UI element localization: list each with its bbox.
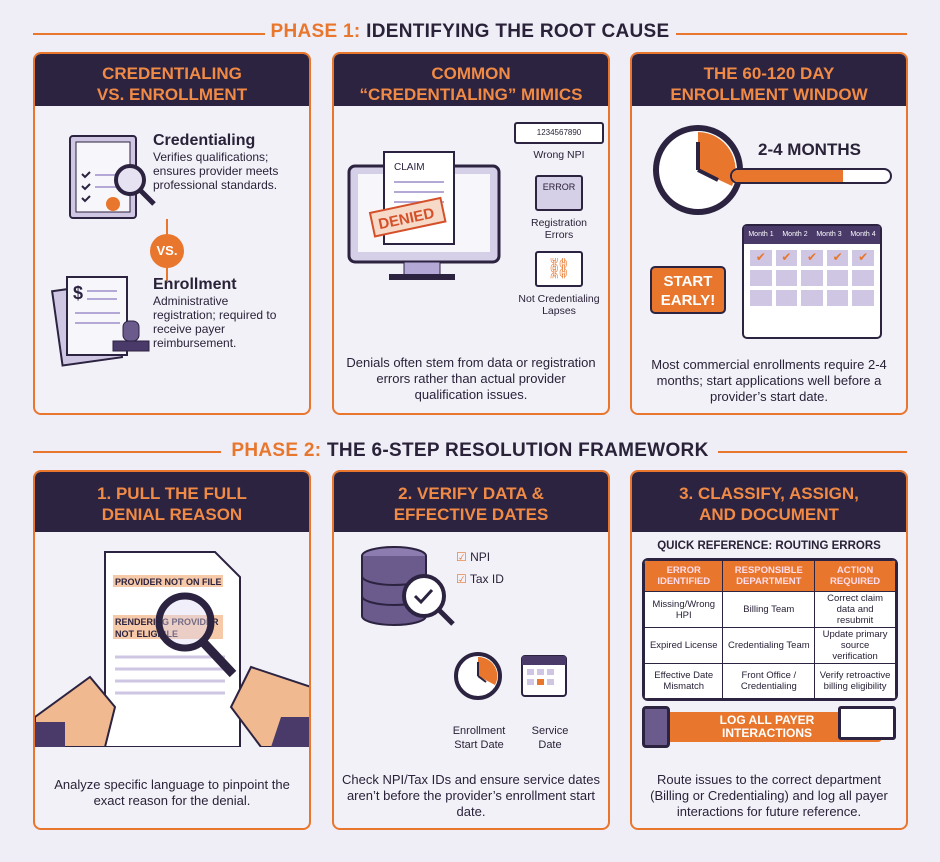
icon: documents with stamp — [51, 276, 150, 367]
panel header: EFFECTIVE DATES — [394, 505, 548, 524]
caption: Analyze specific language to pinpoint the exact reason for the denial. — [54, 777, 290, 808]
icon: calendar: ✔ — [833, 250, 843, 264]
panel: step 3 — [630, 470, 908, 830]
panel: step 2: Date — [538, 739, 562, 751]
panel header: “CREDENTIALING” MIMICS — [360, 85, 582, 104]
panel header — [35, 472, 309, 532]
panel: common mimics — [332, 52, 610, 415]
icon: database with checkmark — [361, 546, 455, 626]
icon: document with magnifier and hands: NOT ELIGIBLE — [115, 629, 178, 639]
panel header: 1. PULL THE FULL — [97, 484, 247, 503]
table: routing errors: ERROR IDENTIFIED — [657, 565, 710, 587]
panel header: VS. ENROLLMENT — [97, 85, 247, 104]
panel: step 2: Service — [532, 725, 568, 737]
icon: calendar: ✔ — [781, 250, 791, 264]
panel header — [334, 472, 608, 532]
checklist: npi, tax id: ☑ Tax ID — [456, 572, 504, 586]
banner: log all payer interactions: LOG ALL PAYER — [720, 713, 814, 727]
panel: credentialing vs enrollment: VS. — [157, 243, 177, 258]
banner: log all payer interactions — [642, 706, 896, 748]
panel header — [632, 54, 906, 106]
icon: calendar small — [521, 655, 567, 697]
icon: clock — [653, 125, 743, 215]
icon list: wrong npi, registration errors, lapses: Errors — [545, 229, 573, 241]
panel header — [334, 54, 608, 106]
table: routing errors: Credentialing Team — [728, 640, 810, 651]
table: routing errors: Billing Team — [743, 604, 794, 615]
table: routing errors — [642, 558, 898, 701]
text: credentialing: Credentialing — [153, 132, 255, 149]
panel header: THE 60-120 DAY — [704, 64, 834, 83]
icon: vs circle — [166, 219, 168, 281]
icon: calendar: ✔ — [858, 250, 868, 264]
icon: monitor with denied claim — [348, 151, 500, 280]
icon list: wrong npi, registration errors, lapses: ⛓ — [546, 258, 572, 280]
icon: calendar: ✔ — [807, 250, 817, 264]
table: routing errors: Correct claim data and resubmit — [827, 593, 883, 626]
table: routing errors: ACTION REQUIRED — [830, 565, 880, 587]
icon: clock small — [454, 652, 502, 700]
callout: start early: START — [664, 273, 712, 290]
panel header: CREDENTIALING — [102, 64, 242, 83]
callout: start early — [650, 266, 726, 314]
panel: step 2 — [332, 470, 610, 830]
text: credentialing: Verifies qualifications; ensures provider meets professional standards. — [153, 150, 278, 192]
panel header: DENIAL REASON — [102, 505, 242, 524]
panel header: 2. VERIFY DATA & — [398, 484, 544, 503]
table: routing errors: RESPONSIBLE DEPARTMENT — [735, 565, 803, 587]
icon: calendar: Month 2 — [782, 231, 808, 238]
panel header: 3. CLASSIFY, ASSIGN, — [679, 484, 859, 503]
icon list: wrong npi, registration errors, lapses: Lapses — [542, 305, 576, 317]
table: routing errors: Front Office / Credentialing — [741, 670, 797, 692]
icon list: wrong npi, registration errors, lapses: ERROR — [543, 182, 575, 192]
icon list: wrong npi, registration errors, lapses: Wrong NPI — [533, 149, 585, 161]
callout: start early: EARLY! — [661, 292, 715, 309]
icon: document with magnifier and hands: PROVIDER NOT ON FILE — [115, 577, 222, 587]
panel header: COMMON — [431, 64, 511, 83]
labels: enrollment start date, service date: Start Date — [454, 739, 504, 751]
icon: monitor with denied claim: CLAIM — [394, 162, 425, 173]
icon: calendar: Month 3 — [816, 231, 842, 238]
labels: enrollment start date, service date — [453, 725, 506, 751]
checklist: npi, tax id — [456, 550, 504, 586]
icon: calendar: Month 1 — [748, 231, 774, 238]
panel header — [35, 54, 309, 106]
icon: certificate with magnifier — [69, 135, 156, 219]
icon: monitor with denied claim: DENIED — [377, 205, 436, 233]
panel: credentialing vs enrollment — [33, 52, 311, 415]
panel header: ENROLLMENT WINDOW — [670, 85, 868, 104]
icon list: wrong npi, registration errors, lapses: Not Credentialing — [518, 293, 600, 305]
icon: document with magnifier and hands — [35, 551, 309, 747]
caption: Most commercial enrollments require 2-4 months; start applications well before a provider’s start date. — [651, 357, 887, 404]
labels: enrollment start date, service date: Enrollment — [453, 725, 505, 737]
panel header — [632, 472, 906, 532]
icon list: wrong npi, registration errors, lapses: Registration — [531, 217, 587, 229]
phase 1 heading: PHASE 1: IDENTIFYING THE ROOT CAUSE — [270, 21, 670, 42]
table title: QUICK REFERENCE: ROUTING ERRORS — [657, 540, 881, 552]
icon: calendar: ✔ — [756, 250, 766, 264]
panel: step 1 — [33, 470, 311, 830]
table: routing errors: Missing/Wrong HPI — [652, 598, 715, 620]
panel: enrollment window — [630, 52, 908, 415]
caption: Route issues to the correct department (Billing or Credentialing) and log all payer interactions for future reference. — [650, 772, 888, 819]
panel header: AND DOCUMENT — [699, 505, 839, 524]
table: routing errors: Verify retroactive billing eligibility — [820, 670, 890, 692]
text: enrollment: Administrative registration; required to receive payer reimbursement. — [153, 294, 276, 350]
icon: calendar: Month 4 — [850, 231, 876, 238]
phase 2 heading: PHASE 2: THE 6-STEP RESOLUTION FRAMEWORK — [231, 440, 709, 461]
banner: log all payer interactions: INTERACTIONS — [722, 726, 812, 740]
checklist: npi, tax id: ☑ NPI — [456, 550, 490, 564]
icon: documents with stamp: $ — [73, 283, 83, 303]
table: routing errors: Expired License — [650, 640, 718, 651]
table: routing errors: Update primary source verification — [823, 629, 888, 662]
icon list: wrong npi, registration errors, lapses — [514, 122, 604, 317]
table: routing errors: Effective Date Mismatch — [654, 670, 713, 692]
caption: Check NPI/Tax IDs and ensure service dates aren’t before the provider’s enrollment start date. — [342, 772, 600, 819]
icon: calendar — [742, 224, 882, 339]
text: enrollment: Enrollment — [153, 276, 237, 293]
text: 2-4 months with bar: 2-4 MONTHS — [758, 140, 861, 159]
icon list: wrong npi, registration errors, lapses: 1234567890 — [537, 128, 581, 137]
icon: document with magnifier and hands: RENDERING PROVIDER — [115, 617, 219, 627]
caption: Denials often stem from data or registration errors rather than actual provider qualification issues. — [346, 355, 596, 402]
